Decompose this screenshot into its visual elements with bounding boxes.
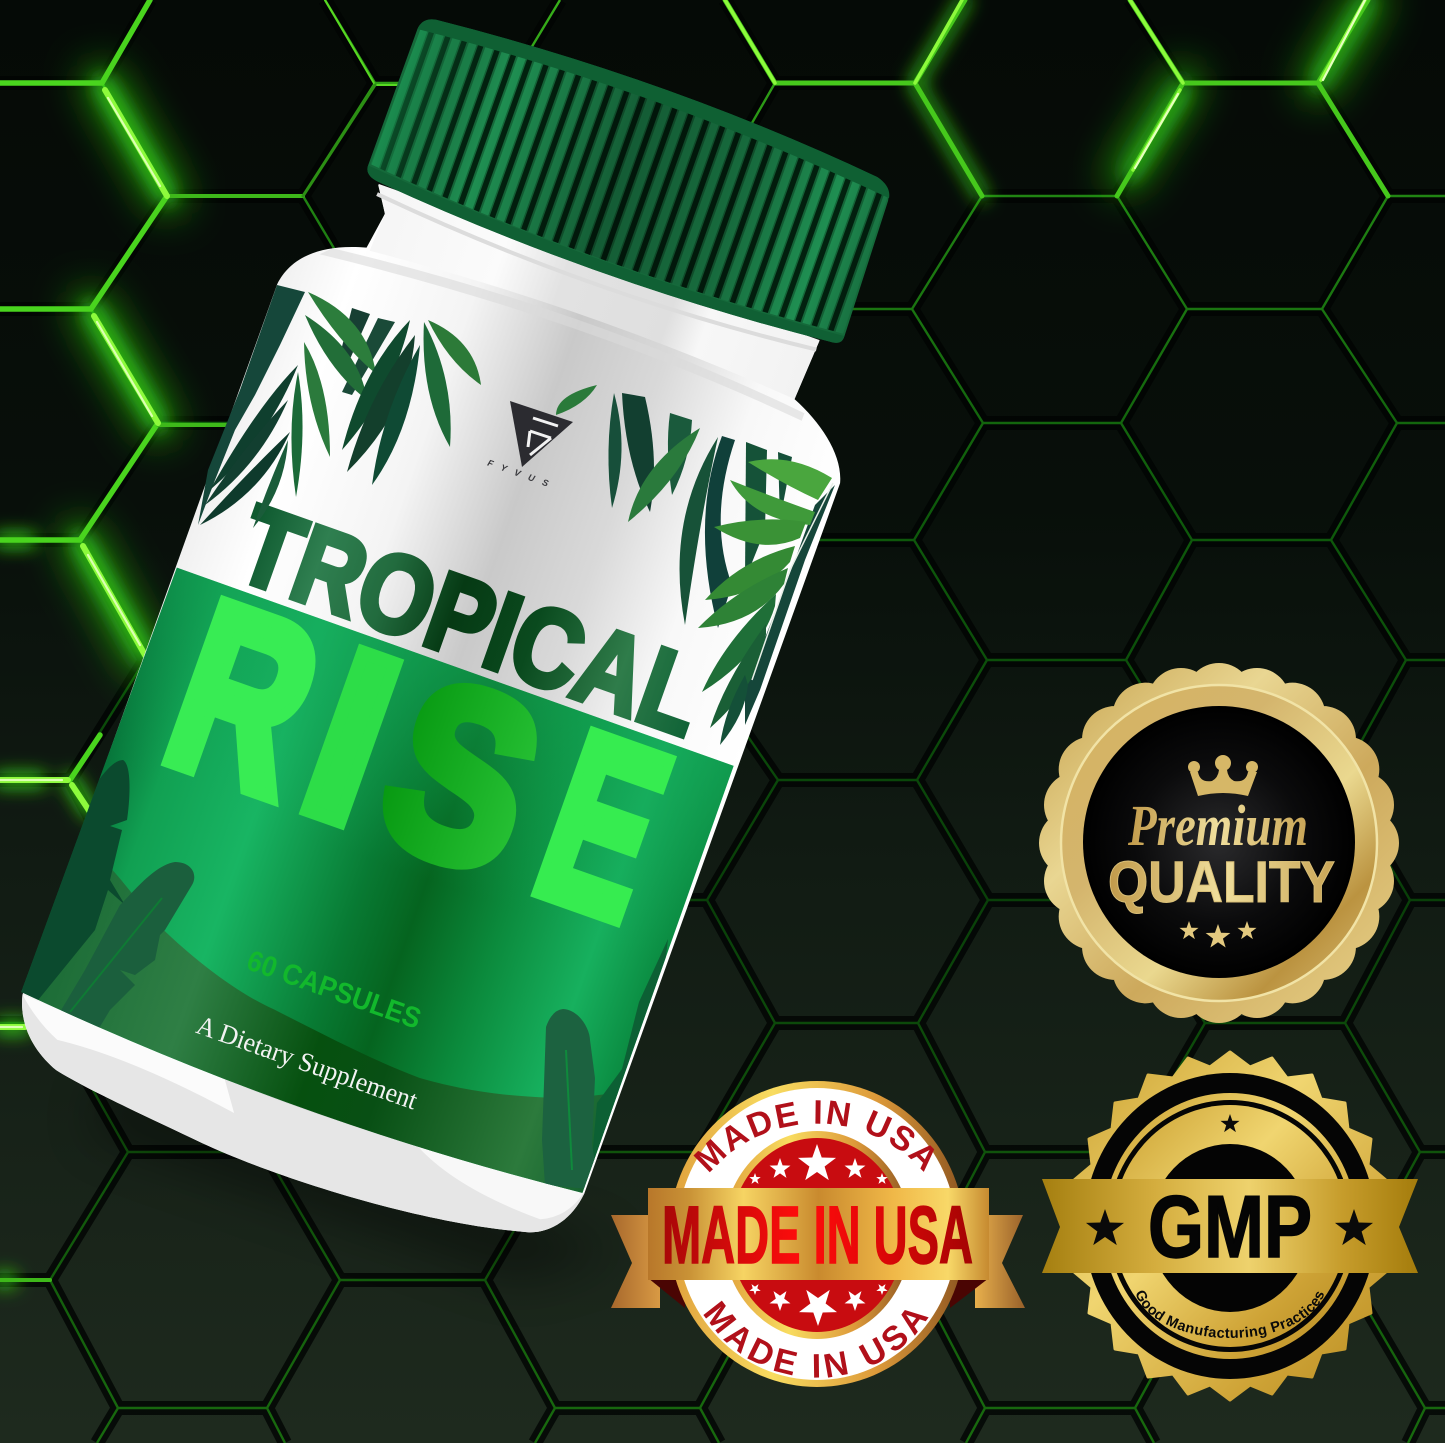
plant midrib xyxy=(70,898,162,1012)
logo leaf xyxy=(556,385,597,415)
word: QUALITY: QUALITY xyxy=(1108,850,1335,915)
badge: premium quality xyxy=(1054,678,1384,1008)
badge: made in usa xyxy=(611,1081,1025,1387)
capsule count: 60 CAPSULES xyxy=(243,945,425,1036)
outer gold rim xyxy=(669,1081,965,1387)
letter I: I xyxy=(275,597,428,875)
scalloped gold edge xyxy=(1072,696,1366,990)
title: TROPICAL: TROPICAL xyxy=(223,482,719,760)
gold banner xyxy=(648,1188,989,1280)
cap shading xyxy=(366,17,896,344)
banner stars xyxy=(1086,1209,1373,1245)
brand name: FYVUS xyxy=(486,458,558,491)
plant leaf: front left xyxy=(60,862,194,1030)
gold disc xyxy=(1054,678,1384,1008)
inner gold ring xyxy=(723,1131,911,1339)
plant midrib right xyxy=(566,1050,572,1170)
title: RISE xyxy=(139,549,697,972)
bottom left highlight xyxy=(9,995,248,1113)
bottle body xyxy=(0,163,882,1274)
inner gold xyxy=(1113,1105,1347,1347)
neck ring highlight xyxy=(373,194,816,361)
logo monogram cuts xyxy=(528,418,558,455)
white ring xyxy=(677,1088,957,1380)
black ring xyxy=(1084,1073,1376,1379)
product bottle xyxy=(0,0,944,1274)
letter R: R xyxy=(139,549,349,848)
arc caption: Good Manufacturing Practices xyxy=(1136,1290,1324,1338)
GMP text: GMP xyxy=(1148,1177,1312,1276)
thin black ring xyxy=(1108,1100,1352,1352)
label wave band xyxy=(16,836,638,1206)
red centre xyxy=(730,1138,904,1332)
gold rim line xyxy=(1061,685,1377,1001)
top arc text xyxy=(700,1124,934,1186)
badge: gmp xyxy=(1042,1050,1418,1402)
foliage: top right fronds xyxy=(608,393,835,745)
plant leaf: tall left xyxy=(22,760,130,1000)
logo triangle xyxy=(510,401,573,467)
label plant silhouettes xyxy=(0,760,668,1190)
letter E: E xyxy=(509,681,696,972)
black centre xyxy=(1150,1144,1310,1312)
cap top rim xyxy=(417,5,898,198)
label top glow xyxy=(16,566,734,1206)
green label xyxy=(16,566,734,1206)
top star xyxy=(1220,1114,1240,1132)
foliage: top left frond xyxy=(198,285,481,528)
cap shell xyxy=(360,4,902,356)
arc path xyxy=(1134,1284,1326,1338)
brand logo mark xyxy=(510,385,597,467)
plant leaf: right rear xyxy=(590,939,668,1180)
plant leaf: right front xyxy=(542,1009,600,1190)
letter S: S xyxy=(352,625,571,927)
bottom right highlight xyxy=(408,1136,583,1230)
neon glow: top right edges xyxy=(725,0,1388,196)
supplement line: A Dietary Supplement xyxy=(193,1010,422,1116)
bottom arc label: MADE IN USA xyxy=(704,1300,929,1378)
white stars xyxy=(749,1144,888,1326)
banner text: MADE IN USA xyxy=(662,1190,973,1281)
bottom base xyxy=(0,995,584,1272)
cap bottom rim xyxy=(360,165,845,356)
cap ribs xyxy=(366,17,896,344)
shoulder shading xyxy=(320,231,809,425)
ribbon tails xyxy=(611,1215,1025,1308)
bottle shadow xyxy=(90,1080,620,1280)
serrated gold seal xyxy=(1067,1052,1393,1400)
neon glow: left edges xyxy=(0,0,400,1280)
crown xyxy=(1188,755,1258,796)
top arc label: MADE IN USA xyxy=(694,1100,934,1172)
gold ring xyxy=(1103,1093,1357,1359)
black centre xyxy=(1083,706,1355,978)
word: Premium: Premium xyxy=(1127,793,1308,858)
bottom arc text xyxy=(690,1284,944,1378)
cap xyxy=(360,4,902,356)
banner xyxy=(1042,1179,1418,1273)
three stars xyxy=(1179,921,1257,948)
neck xyxy=(356,184,820,402)
